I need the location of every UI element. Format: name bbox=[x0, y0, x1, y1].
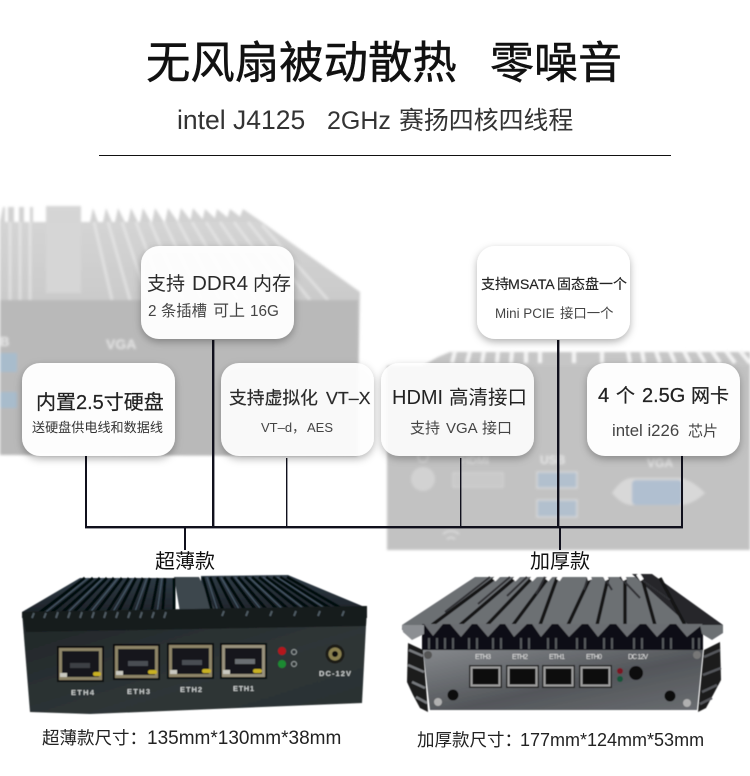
dimensions: thick: 177mm*124mm*53mm bbox=[520, 730, 704, 750]
background photo: right device bbox=[387, 351, 750, 550]
card: HDMI: VGA bbox=[446, 420, 478, 437]
card: DDR4 memory: 支持 bbox=[147, 273, 185, 295]
photo: thick device: ETH0 bbox=[586, 654, 602, 661]
card: DDR4 memory: 内存 bbox=[253, 273, 291, 295]
dimensions: ultra-thin: 超薄款尺寸： bbox=[42, 728, 147, 748]
background photo: left device bbox=[0, 206, 360, 456]
subtitle: 赛扬四核四线程 bbox=[399, 107, 573, 135]
card: mSATA bbox=[477, 246, 630, 339]
dimensions: ultra-thin: 135mm*130mm*38mm bbox=[147, 728, 341, 749]
photo: ultra-thin device: ETH3 bbox=[127, 687, 150, 696]
photo: thick device: DC 12V bbox=[628, 654, 648, 661]
card: network: 个 bbox=[616, 385, 635, 407]
antenna holes bbox=[448, 690, 458, 700]
card: network: 芯片 bbox=[688, 423, 718, 440]
background label: USB: USB bbox=[540, 453, 566, 467]
DC jack bbox=[326, 644, 344, 664]
label: ultra-thin model: 超薄款 bbox=[155, 550, 215, 573]
LEDs bbox=[617, 668, 623, 674]
background label: VGA: VGA bbox=[106, 336, 136, 352]
card: HDMI: 接口 bbox=[482, 420, 512, 437]
card: mSATA: MSATA bbox=[508, 277, 555, 293]
card: 2.5 inch drive: 送硬盘供电线和数据线 bbox=[32, 419, 163, 435]
photo: thick device: ETH1 bbox=[549, 654, 565, 661]
photo: ultra-thin device: ETH2 bbox=[180, 685, 202, 694]
card: network: intel i226 bbox=[612, 421, 679, 440]
background label: USB: B bbox=[0, 334, 9, 349]
title: 零噪音 bbox=[490, 39, 622, 88]
card: network: 网卡 bbox=[691, 385, 729, 407]
card: DDR4 memory bbox=[141, 246, 294, 339]
label: thick model: 加厚款 bbox=[530, 550, 590, 573]
card: DDR4 memory: 可上 bbox=[213, 302, 245, 320]
card: HDMI: 支持 bbox=[410, 420, 440, 437]
card: mSATA: Mini PCIE bbox=[495, 306, 555, 321]
DC jack bbox=[629, 666, 643, 680]
subtitle: 2GHz bbox=[327, 107, 391, 135]
card: DDR4 memory: DDR4 bbox=[192, 272, 248, 295]
card: virtualization bbox=[221, 363, 374, 456]
photo: ultra-thin device: ETH1 bbox=[233, 684, 254, 693]
photo: thick device bbox=[402, 574, 723, 712]
card: mSATA: 固态盘一个 bbox=[557, 276, 627, 292]
photo: thick device: ETH2 bbox=[512, 654, 528, 661]
port labels: ETH4 bbox=[71, 688, 95, 697]
card: virtualization: 支持虚拟化 bbox=[229, 388, 318, 408]
port labels: ETH3 bbox=[475, 654, 491, 661]
card: virtualization: VT–X bbox=[326, 388, 371, 408]
background label: HDMI: HDMI bbox=[461, 455, 489, 467]
photo: ultra-thin device bbox=[22, 575, 367, 714]
title: 无风扇被动散热 bbox=[146, 39, 457, 88]
card: 2.5 inch drive bbox=[22, 363, 175, 456]
card: 2.5 inch drive: 内置2.5寸硬盘 bbox=[36, 391, 164, 414]
card: network: 2.5G bbox=[642, 385, 685, 407]
card: mSATA: 接口一个 bbox=[560, 305, 614, 321]
card: network bbox=[587, 363, 740, 456]
connector lines bbox=[85, 340, 683, 550]
card: DDR4 memory: 2 bbox=[148, 303, 157, 320]
card: DDR4 memory: 16G bbox=[250, 303, 279, 320]
card: DDR4 memory: 条插槽 bbox=[161, 303, 207, 320]
LEDs bbox=[278, 647, 286, 655]
ports bbox=[57, 646, 104, 682]
card: virtualization: AES bbox=[307, 420, 333, 435]
ports bbox=[469, 665, 612, 688]
card: virtualization: VT–d， bbox=[261, 420, 305, 435]
subtitle: intel J4125 bbox=[177, 105, 305, 135]
card: HDMI bbox=[381, 363, 534, 456]
card: HDMI: HDMI bbox=[392, 387, 443, 409]
background label: VGA: VGA bbox=[647, 456, 673, 470]
dimensions: thick: 加厚款尺寸： bbox=[417, 730, 522, 750]
card: mSATA: 支持 bbox=[481, 276, 509, 292]
photo: ultra-thin device: DC-12V bbox=[319, 669, 351, 678]
card: network: 4 bbox=[598, 385, 609, 407]
card: HDMI: 高清接口 bbox=[449, 387, 527, 409]
